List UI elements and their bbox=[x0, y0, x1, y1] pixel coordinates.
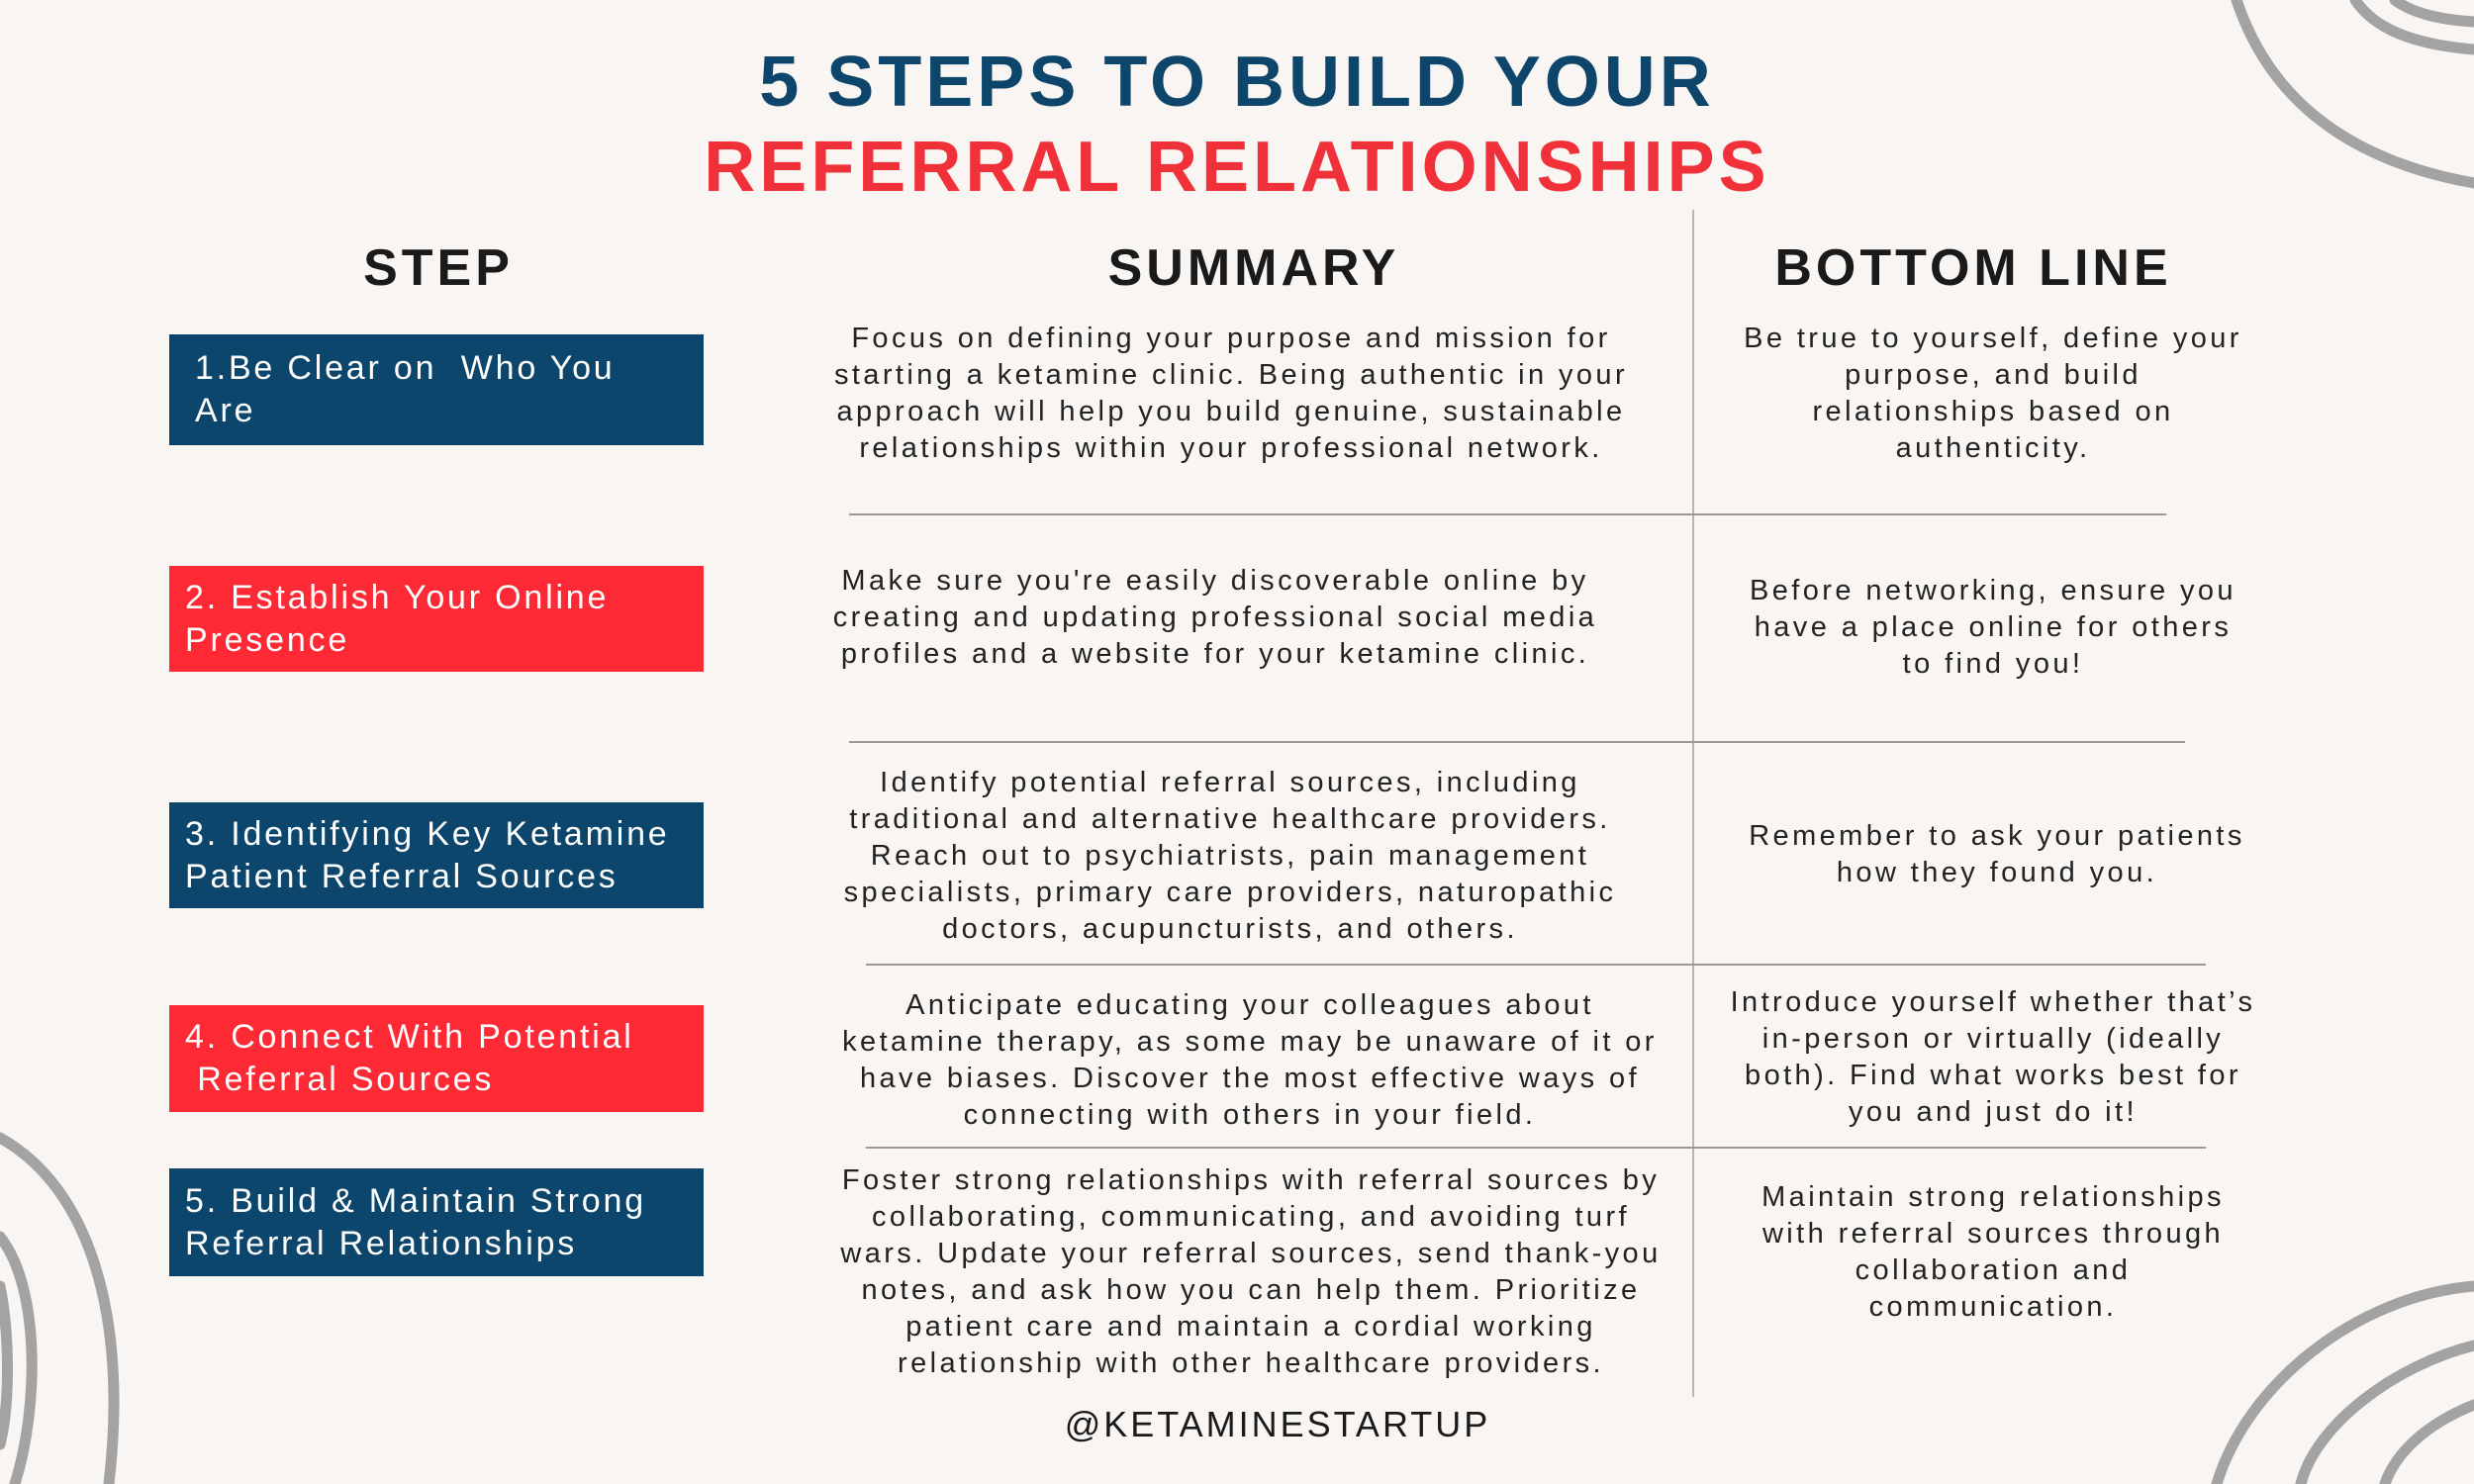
step 3 box bbox=[169, 802, 704, 908]
step 2 box: Presence bbox=[185, 621, 349, 659]
step 2 box bbox=[169, 566, 704, 672]
step 5 box bbox=[169, 1168, 704, 1276]
summary 1: relationships within your professional network. bbox=[859, 432, 1603, 464]
step 4 box: Referral Sources bbox=[197, 1061, 494, 1098]
summary 3: traditional and alternative healthcare providers. bbox=[849, 803, 1611, 835]
step 1 box: 1.Be Clear on Who You bbox=[195, 349, 616, 387]
bottom line 1 bbox=[1744, 323, 2242, 464]
step 3 box: Patient Referral Sources bbox=[185, 857, 618, 894]
summary 1: Focus on defining your purpose and mission for bbox=[851, 323, 1611, 354]
bottom line 5: communication. bbox=[1869, 1291, 2117, 1323]
summary 1: approach will help you build genuine, sustainable bbox=[837, 396, 1625, 427]
bottom line 2: have a place online for others bbox=[1755, 611, 2232, 643]
bottom line 2: to find you! bbox=[1903, 648, 2083, 680]
summary 5: Foster strong relationships with referral sources by bbox=[842, 1164, 1660, 1196]
bottom line 5 bbox=[1761, 1181, 2225, 1323]
summary 4: have biases. Discover the most effective ways of bbox=[860, 1063, 1640, 1094]
title: REFERRAL RELATIONSHIPS bbox=[704, 128, 1770, 207]
header: summary: SUMMARY bbox=[1108, 239, 1399, 297]
bottom line 5: with referral sources through bbox=[1762, 1218, 2224, 1250]
summary 3: Identify potential referral sources, including bbox=[880, 767, 1580, 798]
bottom line 4: both). Find what works best for bbox=[1745, 1060, 2241, 1091]
bottom line 4 bbox=[1731, 986, 2255, 1128]
bottom line 3 bbox=[1749, 820, 2245, 888]
header: bottom line: BOTTOM LINE bbox=[1774, 239, 2172, 297]
bottom line 3: how they found you. bbox=[1837, 857, 2157, 888]
summary 4: Anticipate educating your colleagues about bbox=[905, 989, 1594, 1021]
bottom line 4: you and just do it! bbox=[1849, 1096, 2138, 1128]
title: 5 STEPS TO BUILD YOUR bbox=[759, 43, 1715, 122]
summary 4: connecting with others in your field. bbox=[964, 1099, 1536, 1131]
step 5 box: 5. Build & Maintain Strong bbox=[185, 1181, 646, 1219]
step 2 box: 2. Establish Your Online bbox=[185, 578, 609, 615]
bottom line 4: in-person or virtually (ideally bbox=[1762, 1023, 2224, 1055]
summary 2: creating and updating professional social media bbox=[833, 602, 1597, 633]
summary 2: profiles and a website for your ketamine clinic. bbox=[841, 638, 1589, 670]
step 1 box: Are bbox=[195, 392, 255, 429]
bottom line 2 bbox=[1750, 575, 2236, 680]
summary 4: ketamine therapy, as some may be unaware of it or bbox=[842, 1026, 1658, 1058]
summary 5: notes, and ask how you can help them. Prioritize bbox=[861, 1274, 1641, 1306]
bottom line 5: Maintain strong relationships bbox=[1761, 1181, 2225, 1213]
summary 3: Reach out to psychiatrists, pain management bbox=[871, 840, 1589, 872]
bottom line 1: authenticity. bbox=[1896, 432, 2090, 464]
summary 1: starting a ketamine clinic. Being authentic in your bbox=[834, 359, 1628, 391]
footer handle: @KETAMINESTARTUP bbox=[1065, 1404, 1490, 1444]
summary 5: collaborating, communicating, and avoiding turf bbox=[872, 1201, 1630, 1233]
bottom line 1: relationships based on bbox=[1813, 396, 2173, 427]
summary 2 bbox=[833, 565, 1597, 670]
bottom line 1: purpose, and build bbox=[1845, 359, 2141, 391]
step 3 box: 3. Identifying Key Ketamine bbox=[185, 815, 670, 853]
summary 5: relationship with other healthcare providers. bbox=[898, 1347, 1604, 1379]
bottom line 1: Be true to yourself, define your bbox=[1744, 323, 2242, 354]
summary 5: wars. Update your referral sources, send thank-you bbox=[840, 1238, 1662, 1269]
step 5 box: Referral Relationships bbox=[185, 1225, 577, 1262]
title bbox=[704, 43, 1770, 207]
bottom line 2: Before networking, ensure you bbox=[1750, 575, 2236, 606]
bottom line 4: Introduce yourself whether that’s bbox=[1731, 986, 2255, 1018]
step 4 box bbox=[169, 1005, 704, 1112]
summary 3: specialists, primary care providers, naturopathic bbox=[844, 877, 1616, 908]
bottom line 3: Remember to ask your patients bbox=[1749, 820, 2245, 852]
step 1 box bbox=[169, 334, 704, 445]
summary 2: Make sure you're easily discoverable online by bbox=[841, 565, 1589, 597]
summary 4 bbox=[842, 989, 1658, 1131]
step 4 box: 4. Connect With Potential bbox=[185, 1018, 634, 1056]
summary 3: doctors, acupuncturists, and others. bbox=[942, 913, 1518, 945]
header: step: STEP bbox=[363, 239, 514, 297]
bottom line 5: collaboration and bbox=[1856, 1254, 2131, 1286]
summary 3 bbox=[844, 767, 1616, 945]
summary 1 bbox=[834, 323, 1628, 464]
summary 5 bbox=[840, 1164, 1662, 1379]
summary 5: patient care and maintain a cordial working bbox=[905, 1311, 1596, 1343]
